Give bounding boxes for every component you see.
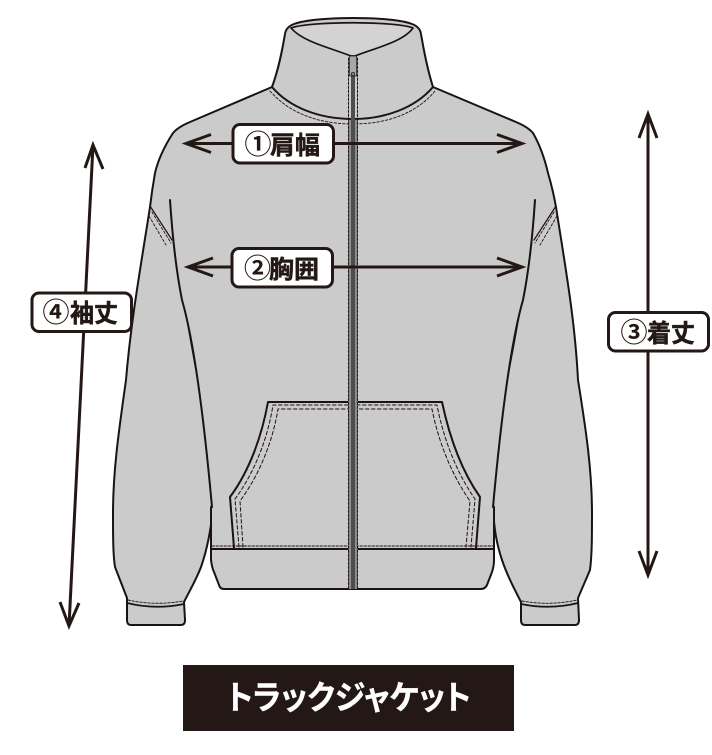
arrow: shoulder width [186,134,522,152]
sleeve seam stitching [149,212,557,245]
label: shoulder width: 肩幅 [270,132,320,160]
pocket [230,402,480,548]
hem stitching [212,545,493,547]
label: sleeve length: ④ [42,298,70,328]
label: chest: 胸囲 [269,256,319,284]
cuff seams [127,603,578,607]
zipper [348,56,358,589]
jacket illustration [113,18,592,625]
sleeve seams [150,206,556,240]
label: body length: ③ [620,318,648,348]
arrow: chest [188,258,522,276]
right sleeve [493,200,592,625]
arrow: sleeve length [60,145,103,626]
label: shoulder width [233,124,334,163]
left sleeve [113,200,213,625]
title banner [183,665,514,731]
jacket body [150,87,556,589]
label: sleeve length: 袖丈 [70,300,118,328]
label: body length: 着丈 [647,320,695,348]
collar inner opening [291,23,413,56]
label: shoulder width: ① [244,130,272,160]
pocket stitching [235,405,475,547]
label: chest: ② [244,254,271,284]
label: sleeve length [32,293,132,332]
cuff stitching [128,600,577,603]
armhole lines [170,200,535,507]
hem seam [212,548,493,550]
collar stitching [270,91,435,124]
arrow: body length [639,114,657,575]
collar [272,18,433,119]
label: chest [232,248,332,287]
outer shoulder and side lines [150,87,556,207]
hem [211,507,494,589]
label: body length [608,312,708,351]
title banner: トラックジャケット [227,679,471,716]
